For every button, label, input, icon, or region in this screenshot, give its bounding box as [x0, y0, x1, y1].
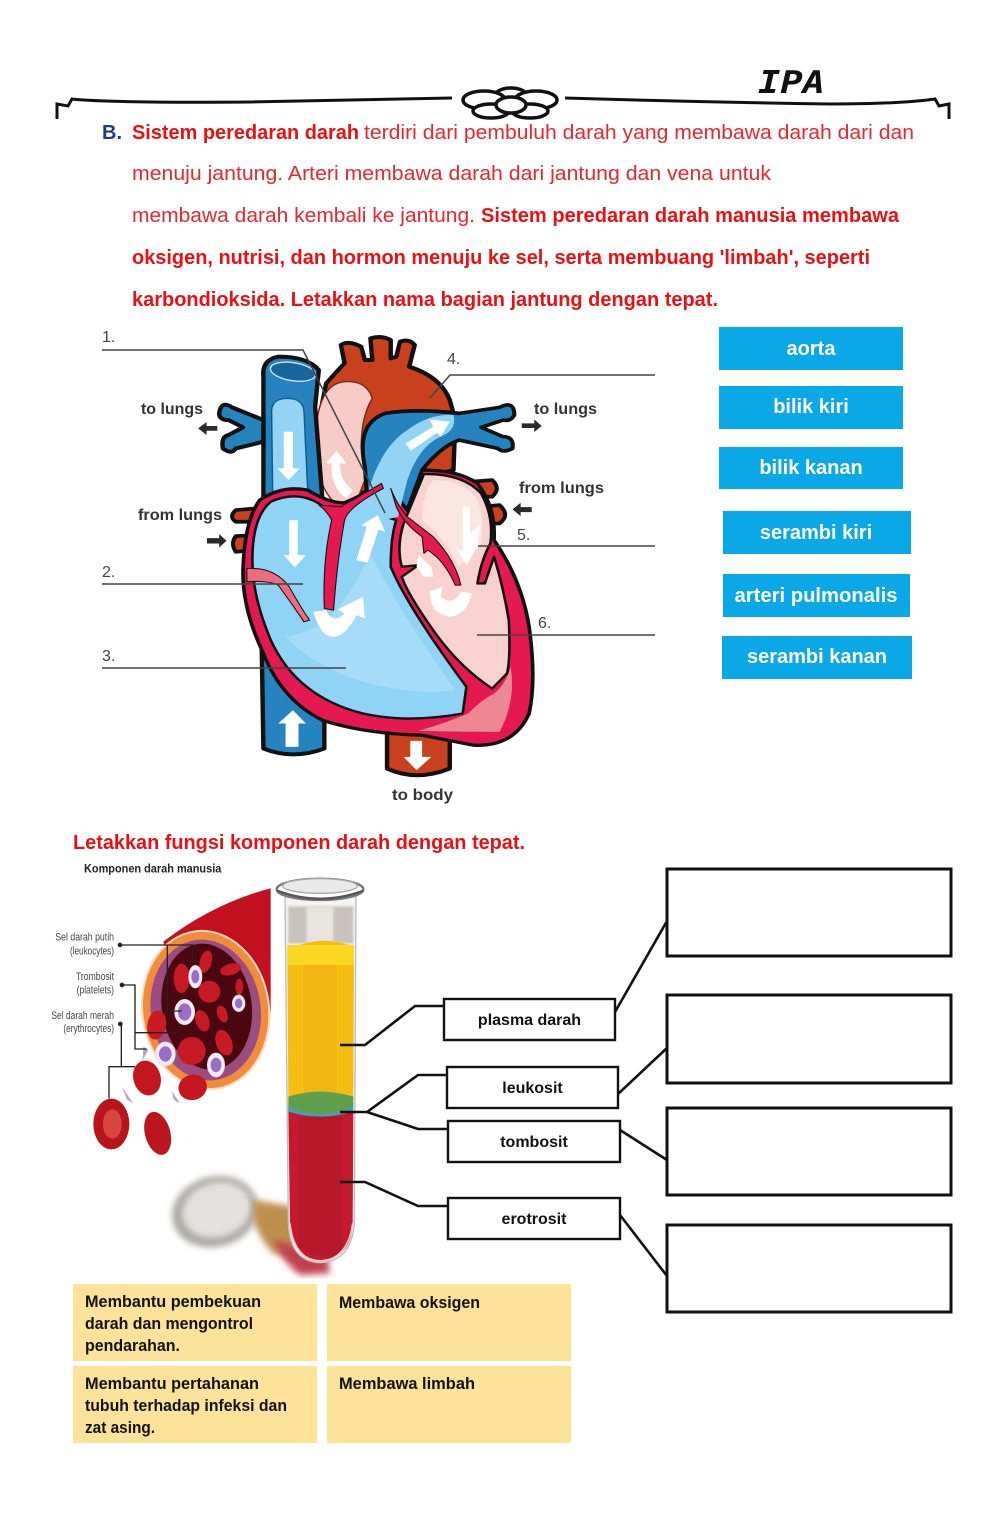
heart labels: to body [392, 787, 453, 804]
cell type labels: Trombosit [76, 971, 114, 983]
tricuspid septum valve [319, 483, 383, 610]
pulmonary veins, left [232, 508, 256, 552]
function card: limbah [327, 1366, 571, 1443]
numbered leader lines: 1. [102, 329, 115, 346]
heart muscle wall [243, 470, 533, 745]
connector lines [340, 921, 667, 1276]
intro paragraph: B. [102, 122, 122, 144]
function card: pembekuan: Membantu pembekuan [85, 1293, 261, 1311]
intro paragraph: terdiri dari pembuluh darah yang membawa darah dari dan [364, 122, 914, 144]
pulmonary artery [363, 405, 514, 510]
left valve flap [247, 568, 310, 622]
vessel [132, 888, 279, 1097]
aorta [319, 337, 455, 493]
loose red blood cells [93, 1047, 210, 1158]
heart labels: from lungs [519, 480, 604, 497]
answer box 1 [667, 869, 951, 956]
right heart chamber [252, 490, 466, 719]
figure title: Komponen darah manusia [84, 862, 222, 876]
heart labels: to lungs [534, 401, 597, 418]
descending aorta [387, 727, 450, 775]
function card: pertahanan [73, 1366, 317, 1443]
answer box 2 [667, 995, 951, 1083]
label button: aorta [719, 327, 903, 370]
label button: bilik kiri [719, 386, 903, 429]
label button: bilik kanan: bilik kanan [759, 457, 863, 479]
intro paragraph: karbondioksida. Letakkan nama bagian jantung dengan tepat. [132, 289, 718, 311]
label button: serambi kiri: serambi kiri [760, 522, 872, 544]
intro paragraph: Sistem peredaran darah [132, 122, 359, 144]
heart diagram [198, 337, 542, 775]
label button: aorta: aorta [787, 338, 836, 360]
cell type labels: (erythrocytes) [63, 1023, 114, 1035]
answer box 3 [667, 1108, 951, 1195]
component label: plasma darah [444, 999, 615, 1040]
cell callout lines [109, 943, 193, 1098]
label button: bilik kiri: bilik kiri [773, 396, 849, 418]
intro paragraph [102, 122, 914, 311]
pulmonary trunk interior [369, 415, 454, 520]
label button: bilik kanan [719, 447, 903, 489]
function card: pertahanan: tubuh terhadap infeksi dan [85, 1397, 287, 1415]
heart labels: from lungs [138, 507, 222, 524]
subject label: IPA: IPA [758, 65, 825, 101]
left pulmonary branches [219, 405, 263, 452]
component label: leukosit: leukosit [502, 1080, 563, 1097]
component label: tombosit [448, 1121, 620, 1162]
header ornament [57, 88, 949, 119]
component label: erotrosit [448, 1198, 620, 1239]
numbered leader lines: 6. [538, 615, 551, 632]
intro paragraph: Sistem peredaran darah manusia membawa [481, 205, 900, 227]
function card: oksigen: Membawa oksigen [339, 1294, 480, 1312]
component label: plasma darah: plasma darah [478, 1012, 581, 1029]
label button: serambi kanan: serambi kanan [747, 646, 887, 668]
cell type labels: Sel darah putih [55, 932, 114, 944]
section heading: Letakkan fungsi komponen darah dengan tepat. [73, 832, 525, 854]
mitral valve [391, 488, 461, 585]
cell type labels: (leukocytes) [70, 946, 114, 958]
inferior vena cava [262, 640, 324, 754]
intro paragraph: menuju jantung. Arteri membawa darah dari jantung dan vena untuk [132, 163, 772, 185]
lower wall highlight [418, 667, 512, 732]
function card: oksigen [327, 1284, 571, 1361]
function card: pertahanan: zat asing. [85, 1419, 155, 1437]
label button: serambi kiri [723, 511, 911, 554]
intro paragraph: membawa darah kembali ke jantung. [132, 205, 475, 227]
test tube [277, 879, 363, 1263]
numbered leader lines: 3. [102, 648, 115, 665]
heart labels: to lungs [141, 401, 203, 418]
numbered leader lines: 2. [102, 564, 115, 581]
left heart chamber [399, 474, 509, 689]
label button: arteri pulmonalis [723, 574, 910, 617]
cell type labels: (platelets) [77, 984, 114, 996]
component label: leukosit [447, 1067, 618, 1108]
pulmonary veins, right [470, 480, 505, 524]
intro paragraph: oksigen, nutrisi, dan hormon menuju ke sel, serta membuang 'limbah', seperti [132, 247, 870, 269]
direction arrows [198, 419, 542, 547]
superior vena cava [263, 357, 322, 510]
numbered leader lines: 4. [447, 351, 460, 368]
heart labels [138, 401, 604, 804]
component label: erotrosit: erotrosit [502, 1211, 567, 1228]
cell type labels [51, 932, 114, 1035]
component label: tombosit: tombosit [500, 1134, 568, 1151]
function card: limbah: Membawa limbah [339, 1375, 475, 1393]
function card: pembekuan: pendarahan. [85, 1337, 180, 1355]
function card: pembekuan: darah dan mengontrol [85, 1315, 253, 1333]
function card: pertahanan: Membantu pertahanan [85, 1375, 259, 1393]
blood components figure [51, 862, 363, 1275]
aorta inner channel [315, 382, 372, 503]
answer box 4 [667, 1225, 951, 1312]
function card: pembekuan [73, 1284, 317, 1361]
tube shadow [164, 1167, 330, 1275]
numbered leader lines [102, 329, 655, 668]
numbered leader lines: 5. [517, 527, 530, 544]
chamber highlight [286, 553, 455, 692]
label button: arteri pulmonalis: arteri pulmonalis [734, 585, 898, 607]
white flow arrows [277, 419, 480, 770]
chamber shading [422, 480, 482, 567]
label button: serambi kanan [722, 636, 912, 679]
cell type labels: Sel darah merah [51, 1010, 114, 1022]
